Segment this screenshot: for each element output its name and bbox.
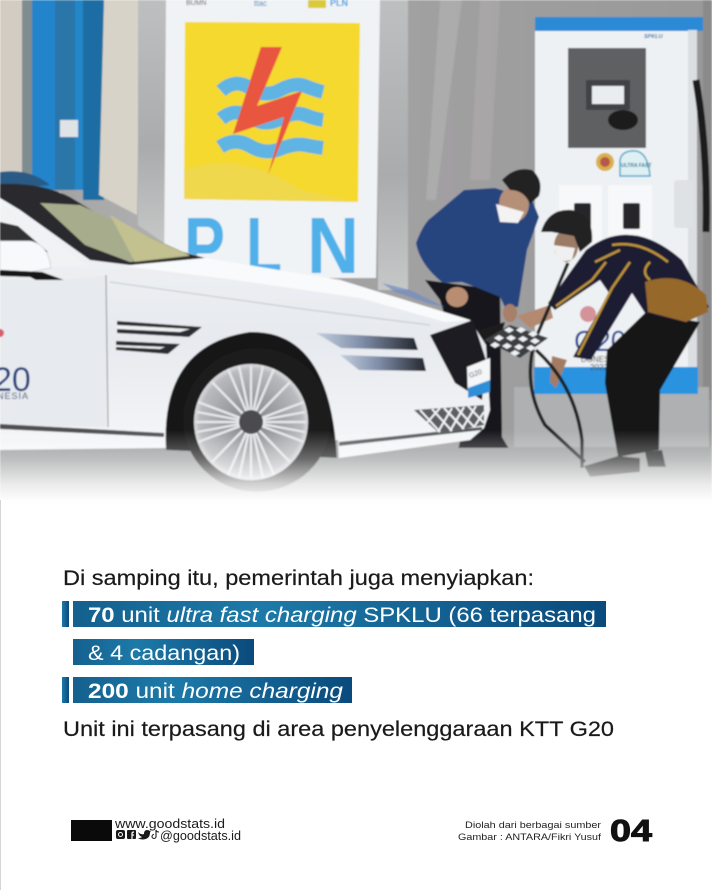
charging station: SPKLU <box>644 34 664 40</box>
list item: 70 unit ultra fast charging: & 4 cadangan) <box>88 641 240 665</box>
charging cables <box>530 263 585 468</box>
intro sentence: Di samping itu, pemerintah juga menyiapkan: <box>63 566 534 590</box>
social handle: @goodstats.id <box>160 828 241 843</box>
electric car <box>0 171 490 492</box>
highlighted list <box>62 601 606 703</box>
photo: president charging an electric car at a PLN charging station <box>0 0 712 515</box>
source credit: Gambar : ANTARA/Fikri Yusuf <box>458 832 601 843</box>
source credit: Diolah dari berbagai sumber <box>465 820 601 831</box>
banner: PLN logo: P <box>184 201 225 290</box>
background wall and curtain <box>0 0 712 470</box>
charging station <box>514 17 709 447</box>
charging station: ULTRA FAST <box>621 163 652 169</box>
source credit <box>458 820 601 843</box>
logo placeholder <box>71 820 112 841</box>
person in blue shirt <box>416 169 540 458</box>
banner: PLN logo: N <box>307 201 359 290</box>
banner: PLN logo <box>164 0 380 290</box>
footer <box>71 813 653 848</box>
page number: 04 <box>610 813 653 848</box>
social icons <box>116 830 159 840</box>
left page edge <box>0 500 1 890</box>
electric car: G20 <box>468 369 483 380</box>
ground <box>0 448 712 508</box>
list item: 200 unit home charging: 200 unit home charging <box>88 679 343 703</box>
white fade at the bottom of the photo <box>0 430 712 502</box>
list item: 70 unit ultra fast charging <box>62 601 606 665</box>
person in batik shirt <box>517 210 709 477</box>
banner: PLN logo: L <box>246 201 282 290</box>
list item: 70 unit ultra fast charging: 70 unit ultra fast charging SPKLU (66 terpasang <box>88 603 596 627</box>
charging station: G20 <box>574 326 626 358</box>
website: www.goodstats.id <box>114 816 225 831</box>
banner: PLN logo: BUMN <box>186 0 207 7</box>
closing sentence: Unit ini terpasang di area penyelenggaraan KTT G20 <box>63 717 614 741</box>
charging plug <box>478 322 548 358</box>
charging station: DONESIA <box>581 355 618 364</box>
charging station: 2022 <box>590 363 608 372</box>
